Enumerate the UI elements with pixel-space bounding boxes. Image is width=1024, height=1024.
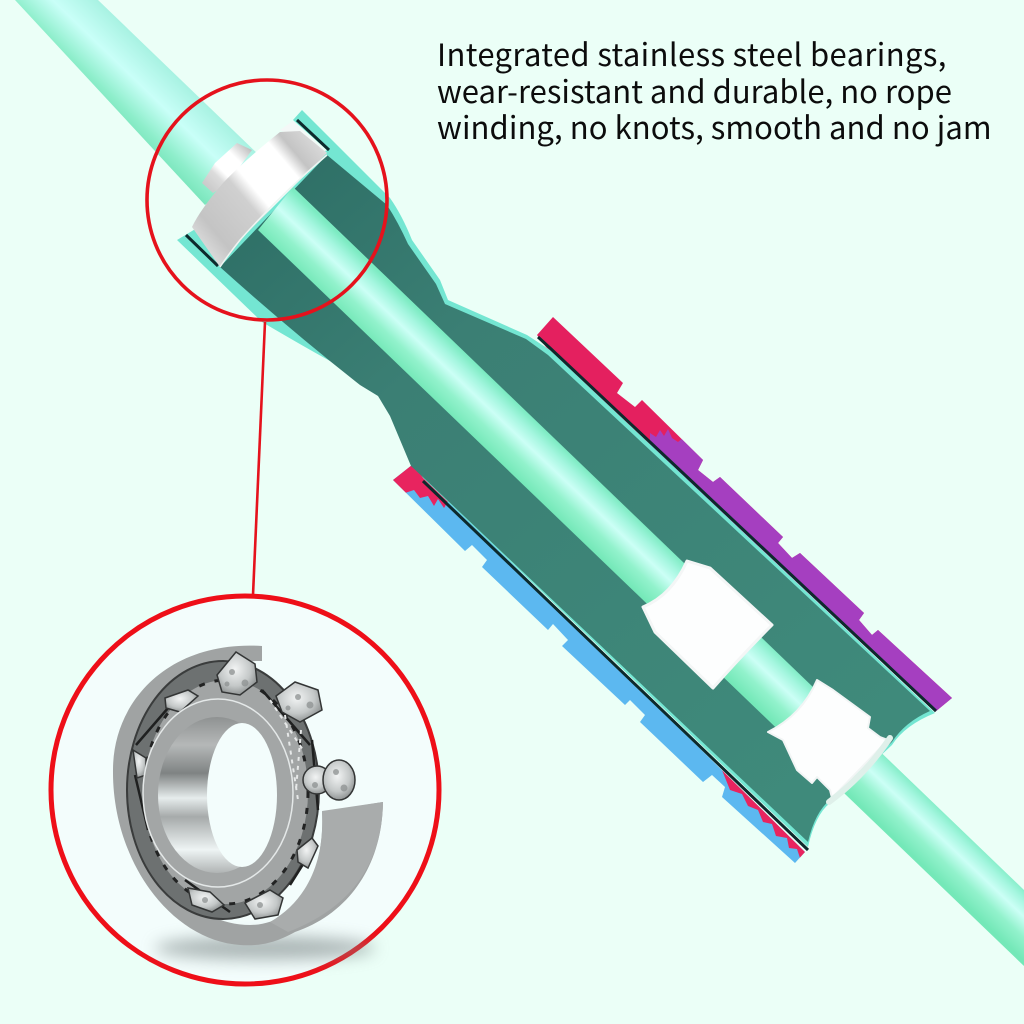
- tape shadow lines: [186, 120, 936, 850]
- red callout circle: bearing: [51, 596, 439, 984]
- white sleeve: middle: [643, 561, 772, 688]
- red connector line: [253, 322, 265, 595]
- icon: stainless steel ball bearing: [113, 646, 383, 960]
- steel balls: [133, 652, 355, 919]
- text block: caption: wear-resistant and durable, no rope: [437, 66, 952, 112]
- strip: purple tape: [650, 429, 952, 712]
- rope: main segment: [258, 187, 1024, 966]
- housing rim: [177, 110, 935, 847]
- text block: caption: Integrated stainless steel bearings,: [437, 30, 947, 75]
- bearing hole: [207, 723, 277, 867]
- inner bore: [158, 717, 276, 873]
- text block: caption: winding, no knots, smooth and no jam: [437, 103, 992, 148]
- panel: grip housing: [177, 110, 1000, 863]
- outer race: [113, 646, 383, 945]
- inner race: [143, 699, 293, 887]
- strip: pink tape: [537, 317, 952, 712]
- bearing shadow: [155, 936, 375, 960]
- blue tape pink ends: [390, 462, 812, 858]
- ball cage: [127, 661, 319, 919]
- rope: upper segment: [15, 0, 262, 205]
- white sleeve: end with flange: [768, 680, 890, 802]
- ball mottling: [202, 669, 348, 908]
- strip: blue tape: [393, 465, 805, 863]
- text block: caption: [437, 30, 992, 148]
- red callout circle: housing detail: [147, 80, 387, 320]
- cut-away outer section: [270, 802, 383, 932]
- housing dark surface: [220, 155, 930, 842]
- bearing disk in housing: [192, 121, 327, 267]
